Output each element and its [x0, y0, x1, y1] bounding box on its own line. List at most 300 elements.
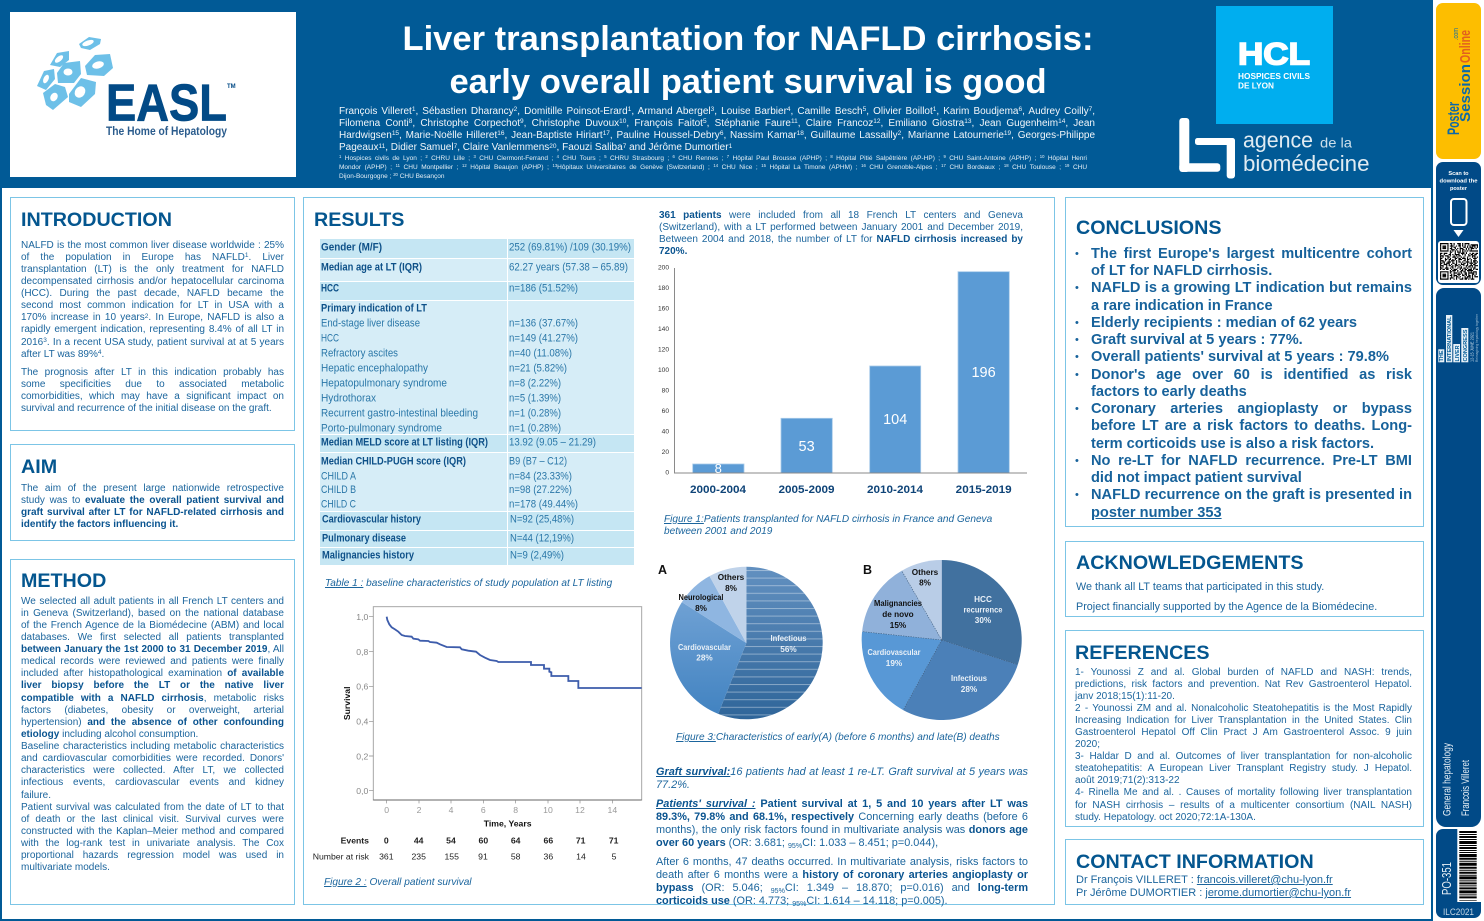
- text: method: multivariate models.: [21, 862, 110, 873]
- title: Liver transplantation for NAFLD cirrhosis:: [402, 20, 1094, 58]
- text: introduction: [21, 240, 284, 414]
- caption: figure 1: [664, 514, 992, 537]
- text: method: between January the 1st 2000 to 31 December 2019, All: [21, 644, 284, 655]
- text: method: Patient survival was calculated from the date of LT to that: [21, 802, 284, 813]
- text: aim: graft survival after LT for NAFLD-related cirrhosis and: [21, 507, 284, 518]
- congress logo: LIVER: [1455, 345, 1461, 362]
- text: references: janv 2018;15(1):11-20.: [1075, 691, 1175, 702]
- bullet list: conclusions: factors to early deaths: [1091, 384, 1247, 400]
- table: baseline characteristics: Hepatopulmonary syndrome: [321, 378, 447, 390]
- text: method: We selected all adult patients in all French LT centers and: [21, 596, 284, 606]
- chart: Kaplan-Meier overall survival: 0,4: [356, 717, 369, 727]
- sidebar: poster number and barcode: [1436, 829, 1481, 918]
- bullet list: conclusions: of LT for NAFLD cirrhosis.: [1091, 263, 1272, 279]
- chart: bar chart of transplants per period: 2000-2004: [690, 484, 747, 496]
- logo: HCL: DE LYON: [1238, 81, 1274, 91]
- table: baseline characteristics: Median age at LT (IQR): [321, 262, 422, 274]
- logo: EASL: The Home of Hepatology: [106, 125, 227, 138]
- chart: pie A and pie B: [658, 560, 1022, 720]
- text: method: in Geneva (Switzerland), based on the national database: [21, 608, 284, 619]
- panel: conclusions: •: [1075, 317, 1079, 329]
- chart: Kaplan-Meier overall survival: 361: [379, 852, 394, 862]
- text: acknowledgements: We thank all LT teams that participated in this study.: [1076, 581, 1324, 593]
- authors: François Villeret1, Sébastien Dharancy2, Domitille Poinsot-Erard1, Armand Abergel3, Louise Barbier4, Camille Besch5, Olivier Boillot1, Karim Boudjema6, Audrey Coilly7,: [339, 106, 1095, 116]
- chart: bar chart of transplants per period: 196: [971, 365, 996, 381]
- text: introduction: NALFD is the most common liver disease worldwide : 25%: [21, 240, 284, 250]
- text: method: characteristics were collected. After LT, we collected: [21, 765, 284, 776]
- table: baseline characteristics: 62.27 years (57.38 – 65.89): [509, 262, 628, 274]
- chart: Kaplan-Meier overall survival: 6: [481, 805, 486, 815]
- chart: bar chart of transplants per period: 2015-2019: [956, 484, 1012, 496]
- chart: bar chart of transplants per period: 140: [658, 326, 669, 333]
- heading: conclusions: CONCLUSIONS: [1076, 217, 1221, 239]
- bullet list: conclusions: NAFLD is a growing LT indication but remains: [1091, 280, 1412, 296]
- text: method: [21, 596, 284, 873]
- logo: HCL: HOSPICES CIVILS: [1238, 71, 1310, 81]
- chart: bar chart of transplants per period: [658, 264, 1027, 496]
- chart: Kaplan-Meier overall survival: 58: [511, 852, 521, 862]
- text: method: proportional hazards regression model was used in: [21, 850, 284, 861]
- panel: method: [10, 559, 295, 905]
- table: baseline characteristics: n=136 (37.67%): [509, 318, 578, 330]
- text: contact details: Pr Jérôme DUMORTIER : jerome.dumortier@chu-lyon.fr: [1076, 887, 1351, 899]
- pie B: B: [863, 563, 872, 577]
- table: baseline characteristics: End-stage liver disease: [321, 318, 420, 330]
- text: method: databases. We first selected all patients transplanted: [21, 632, 284, 643]
- table: baseline characteristics: n=98 (27.22%): [509, 484, 572, 496]
- chart: bar chart of transplants per period: 53: [799, 439, 815, 455]
- text: method: infectious events, cardiovascular events and kidney: [21, 777, 284, 788]
- pie B: 8%: [919, 578, 932, 588]
- panel: introduction: [10, 197, 295, 431]
- bullet list: conclusions: Donor's age over 60 is identified as risk: [1091, 367, 1412, 383]
- chart: Kaplan-Meier overall survival: 14: [576, 852, 586, 862]
- logo: EASL: TM: [227, 84, 236, 90]
- panel: contact information: [1065, 839, 1424, 905]
- text: references: Increasing Indication for Liver Transplantation in the United States. Clin: [1075, 715, 1412, 726]
- bullet list: conclusions: a rare indication in France: [1091, 298, 1273, 314]
- table: baseline characteristics: N=92 (25,48%): [510, 514, 574, 526]
- text: introduction: (HCC). During the past decade, NAFLD became the: [21, 288, 284, 299]
- chart: Kaplan-Meier overall survival: 54: [446, 836, 456, 846]
- congress logo: Reimagining hepatology together: [1475, 313, 1479, 362]
- text: introduction: survival and recurrence of the initial disease on the graft.: [21, 403, 272, 414]
- logo: agence de la biomédecine: agence: [1243, 128, 1313, 153]
- text: method: compatible with a NAFLD cirrhosis, metabolic risks: [21, 692, 284, 704]
- bullet list: conclusions: Graft survival at 5 years : 77%.: [1091, 332, 1303, 348]
- text: references: Gastroenterol Hepatol Off Clin Pract J Am Gastroenterol Assoc. 9 juin: [1075, 727, 1412, 738]
- panel: aim: [10, 444, 295, 541]
- table: baseline characteristics: CHILD C: [321, 499, 356, 511]
- pie B: [862, 560, 1022, 720]
- sidebar: scan to download with QR code: [1436, 162, 1481, 285]
- bullet list: conclusions: Elderly recipients : median of 62 years: [1091, 315, 1357, 331]
- bullet list: conclusions: term corticoids use is also a risk factors.: [1091, 436, 1374, 452]
- caption: figure 1: between 2001 and 2019: [664, 526, 772, 537]
- text: references: for NASH cirrhosis – results of a multicenter consortium (NAIL NASH): [1075, 800, 1412, 811]
- panel: conclusions: [1065, 197, 1424, 527]
- chart: bar chart of transplants per period: 8: [715, 461, 722, 476]
- chart: Kaplan-Meier overall survival: 12: [575, 805, 585, 815]
- text: introduction: second most common indication for LT in USA with a: [21, 300, 284, 311]
- pie A: Neurological: [678, 593, 724, 602]
- chart: bar chart of transplants per period: 160: [658, 306, 669, 312]
- text: survival results: [656, 766, 1028, 908]
- pie A: Infectious: [770, 634, 807, 643]
- pie B: Cardiovascular: [868, 648, 921, 657]
- panel: references: [1065, 630, 1424, 827]
- panel: conclusions: •: [1075, 455, 1079, 467]
- congress logo: THE: [1439, 350, 1445, 362]
- panel: conclusions: •: [1075, 248, 1079, 260]
- table: baseline characteristics: 252 (69.81%) /109 (30.19%): [509, 242, 631, 254]
- congress logo: General hepatology: [1442, 743, 1454, 816]
- caption: figure 2: Figure 2 : Overall patient survival: [324, 876, 472, 888]
- chart: bar chart of transplants per period: 104: [883, 412, 907, 428]
- chart: Kaplan-Meier overall survival: 5: [612, 852, 617, 862]
- chart: Kaplan-Meier overall survival: Number at risk: [313, 852, 370, 862]
- barcode bars: [1459, 831, 1477, 901]
- text: references: 1- Younossi Z and al. Global burden of NAFLD and NASH: trends,: [1075, 666, 1412, 678]
- text: contact details: [1076, 874, 1352, 899]
- chart: Kaplan-Meier overall survival: Events: [341, 836, 369, 846]
- table: baseline characteristics: n=40 (11.08%): [509, 348, 572, 360]
- text: references: 3- Haldar D and al. Outcomes of liver transplantation for non-alcoholic: [1075, 751, 1412, 762]
- chart: Kaplan-Meier overall survival: 2: [417, 805, 422, 815]
- chart: bar chart of transplants per period: 0: [665, 470, 669, 476]
- text: introduction: decompensated cirrhosis and/or hepatocellular carcinoma: [21, 276, 284, 287]
- table: baseline characteristics: HCC: [321, 283, 339, 295]
- panel: conclusions: •: [1075, 369, 1079, 381]
- logo: EASL: EASL: [106, 75, 227, 133]
- chart: Kaplan-Meier overall survival: 10: [543, 805, 553, 815]
- chart: bar chart of transplants per period: 100: [658, 367, 669, 374]
- text: results intro: (Switzerland), with a LT performed between January 2001 and December 2019,: [659, 222, 1023, 233]
- table: baseline characteristics: Cardiovascular history: [322, 514, 421, 526]
- text: method: liver biopsy before the LT or the native liver: [21, 680, 284, 691]
- chart: Kaplan-Meier overall survival: 36: [544, 852, 553, 862]
- chart: bar chart of transplants per period: 200: [658, 264, 669, 272]
- QR pattern: [1440, 244, 1478, 279]
- text: references: 2 - Younossi ZM and al. Nonalcoholic Steatohepatitis is the Most Rapidly: [1075, 703, 1412, 714]
- pie A: A: [658, 563, 667, 577]
- sidebar: congress banner: [1436, 288, 1481, 827]
- sidebar: PosterSessionOnline badge: Online: [1457, 30, 1474, 63]
- header band: [0, 0, 1433, 188]
- caption: figure 1: Figure 1:Patients transplanted for NAFLD cirrhosis in France and Geneva: [664, 514, 992, 524]
- chart: Kaplan-Meier overall survival: 4: [449, 805, 454, 815]
- sidebar: PosterSessionOnline badge: .com: [1453, 28, 1460, 40]
- chart: bar chart of transplants per period: 80: [662, 388, 669, 394]
- text: method: hypertension) and the absence of other confounding: [21, 717, 284, 728]
- sidebar: scan to download with QR code: poster: [1450, 186, 1468, 192]
- panel: conclusions: •: [1075, 334, 1079, 346]
- table: baseline characteristics: HCC: [321, 333, 339, 345]
- text: introduction: 170% increase in 10 years2. In Europe, NAFLD is also a: [21, 312, 284, 323]
- text: survival results: corticoids use (OR: 4.773; 95%CI: 1.614 – 14.118; p=0.005).: [656, 894, 948, 908]
- table: baseline characteristics: n=8 (2.22%): [509, 378, 561, 390]
- table: baseline characteristics: N=44 (12,19%): [510, 533, 574, 545]
- text: introduction: some specificities due to associated metabolic: [21, 379, 284, 390]
- logo: agence de la biomédecine: [1179, 118, 1370, 178]
- chart: Kaplan-Meier overall survival: 0,2: [356, 751, 369, 761]
- chart: Kaplan-Meier overall survival: [313, 606, 642, 862]
- bullet list: conclusions: did not impact patient survival: [1091, 470, 1302, 486]
- text: references: predictions, risk factors and prevention. Nat Rev Gastroenterol Hepatol.: [1075, 679, 1412, 690]
- text: introduction: The prognosis after LT in this indication probably has: [21, 367, 284, 378]
- text: introduction: comorbidities, which may have a significant impact on: [21, 391, 284, 402]
- pie A: 28%: [696, 654, 713, 662]
- text: survival results: over 60 years (OR: 3.681; 95%CI: 1.033 – 8.451; p=0.044),: [656, 836, 938, 850]
- chart: Kaplan-Meier overall survival: 91: [478, 852, 488, 862]
- pie B: 28%: [961, 685, 978, 694]
- affiliations: 1 Hospices civils de Lyon ; 2 CHRU Lille ; 3 CHU Clermont-Ferrand ; 4 CHU Tours ; 5 CHRU Strasbourg ; 6 CHU Rennes ; 7 Hôpital Paul Brousse (APHP) ; 8 Hôpital Pitié Salpêtrière (AP-HP) ; 9 CHU Saint-Antoine (APHP) ; 10 Hôpital Henri: [339, 154, 1087, 162]
- affiliations: Mondor (APHP) ; 11 CHU Montpellier ; 12 Hôpital Beaujon (APHP) ; 13Hôpitaux Universitaires de Genève (Switzerland) ; 14 CHU Nice ; 15 Hôpital La Timone (APHM) ; 16 CHU Grenoble-Alpes ; 17 CHU Bordeaux ; 18 CHU Toulouse ; 19 CHU: [339, 163, 1087, 171]
- text: introduction: after LT was 89%4.: [21, 349, 104, 360]
- table: baseline characteristics: Recurrent gastro-intestinal bleeding: [321, 408, 478, 420]
- chart: bar chart of transplants per period: 2010-2014: [867, 484, 924, 496]
- bullet list: conclusions: No re-LT for NAFLD recurrence. Pre-LT BMI: [1091, 453, 1412, 469]
- text: survival results: 77.2%.: [656, 778, 690, 790]
- sidebar: PosterSessionOnline badge: Session: [1457, 64, 1474, 122]
- chart: Kaplan-Meier overall survival: 60: [479, 836, 488, 846]
- congress logo: CONGRESS: [1463, 329, 1469, 362]
- congress logo: Francois Villeret: [1460, 759, 1472, 816]
- congress logo: [1438, 313, 1479, 816]
- sidebar: poster number and barcode: ILC2021: [1443, 907, 1474, 917]
- text: references: 2020;: [1075, 739, 1100, 750]
- sidebar: poster number and barcode: PO-351: [1439, 862, 1454, 895]
- text: acknowledgements: Project financially supported by the Agence de la Biomédecine.: [1076, 600, 1377, 612]
- pie A: 8%: [695, 604, 708, 613]
- table: baseline characteristics: CHILD A: [321, 471, 357, 483]
- sidebar: PosterSessionOnline badge: Poster: [1444, 102, 1463, 135]
- chart: Kaplan-Meier overall survival: 0: [384, 805, 389, 815]
- heading: method: METHOD: [21, 570, 106, 592]
- chart: Kaplan-Meier overall survival: 44: [414, 836, 424, 846]
- text: method: Baseline characteristics including metabolic characteristics: [21, 741, 284, 752]
- table: baseline characteristics: 13.92 (9.05 – 21.29): [509, 437, 596, 449]
- pie B: de novo: [882, 610, 914, 619]
- table: baseline characteristics: [320, 239, 634, 565]
- table: baseline characteristics: CHILD B: [321, 484, 356, 496]
- heading: aim: AIM: [21, 456, 57, 478]
- text: aim: identify the factors influencing it.: [21, 519, 178, 530]
- table: baseline characteristics: n=21 (5.82%): [509, 363, 567, 375]
- text: aim: study was to evaluate the overall patient survival and: [21, 495, 284, 506]
- chart: Kaplan-Meier overall survival: 155: [444, 852, 459, 862]
- text: acknowledgements: [1076, 581, 1377, 612]
- pie B: 19%: [886, 659, 903, 668]
- text: method: etiology including alcohol consumption.: [21, 729, 198, 740]
- text: introduction: rapidly emergent indication, representing 8.4% of all LT in: [21, 324, 284, 335]
- panel: conclusions: •: [1075, 489, 1079, 501]
- sidebar: scan to download with QR code: download the: [1440, 178, 1478, 184]
- text: references: study. Hepatology. oct 2020;72:1A-130A.: [1075, 812, 1256, 823]
- text: references: [1074, 666, 1412, 823]
- text: contact details: Dr François VILLERET : francois.villeret@chu-lyon.fr: [1076, 874, 1333, 886]
- table: baseline characteristics: n=186 (51.52%): [509, 283, 578, 295]
- bullet list: conclusions: The first Europe's largest multicentre cohort: [1091, 246, 1412, 262]
- authors: [339, 106, 1095, 153]
- authors: Pageaux11, Didier Samuel7, Claire Vanlemmens20, Faouzi Saliba7 and Jérôme Dumortier1: [339, 142, 732, 153]
- panel: conclusions: •: [1075, 282, 1079, 294]
- pie A: Cardiovascular: [678, 643, 732, 652]
- text: method: included after histopathological examination of available: [21, 668, 284, 679]
- chart: bar chart of transplants per period: 20: [662, 449, 669, 456]
- text: method: factors (diabetes, obesity or overweight, arterial: [21, 705, 284, 716]
- chart: Kaplan-Meier overall survival: 8: [513, 805, 518, 815]
- table: baseline characteristics: Refractory ascites: [321, 348, 399, 360]
- text: references: 4- Rinella Me and al. . Causes of mortality following liver transplantation: [1075, 787, 1412, 798]
- text: introduction: of the population in Europe has NAFLD1. Liver: [21, 252, 284, 263]
- title: early overall patient survival is good: [449, 63, 1047, 101]
- text: method: of death or the last clinical visit. Survival curves were: [21, 814, 284, 825]
- table: baseline characteristics: Malignancies history: [322, 550, 414, 562]
- text: survival results: months), the only risk factors found in multivariate analysis was donors age: [656, 824, 1028, 836]
- frame: left strip: [0, 188, 2, 921]
- chart: Kaplan-Meier overall survival: Time, Years: [484, 818, 532, 828]
- text: references: steatohepatitis: A European Liver Transplant Registry study. J Hepatol.: [1075, 763, 1412, 774]
- text: results intro: 361 patients were included from all 18 French LT centers and Geneva: [659, 210, 1023, 221]
- bullet list: conclusions: NAFLD recurrence on the graft is presented in: [1091, 487, 1412, 503]
- text: results intro: [659, 210, 1023, 257]
- heading: contact information: CONTACT INFORMATION: [1076, 851, 1314, 873]
- panel: results: [303, 197, 1055, 905]
- pie A: Others: [718, 573, 745, 582]
- text: references: août 2019;71(2):313-22: [1075, 775, 1180, 786]
- heading: acknowledgements: ACKNOWLEDGEMENTS: [1076, 552, 1304, 574]
- text: aim: [21, 482, 284, 530]
- chart: Kaplan-Meier overall survival: 1,0: [356, 612, 369, 622]
- logo: HCL: HCL: [1238, 35, 1310, 71]
- sidebar: PosterSessionOnline badge: [1436, 3, 1481, 159]
- text: method: of the French Agence de la Biomédecine (ABM) and local: [21, 620, 284, 631]
- frame: bottom strip: [0, 919, 1433, 921]
- text: survival results: 89.3%, 79.8% and 68.1%, respectively Concerning early deaths (before 6: [656, 810, 1028, 822]
- table: baseline characteristics: n=84 (23.33%): [509, 471, 572, 483]
- pie A: [658, 563, 823, 719]
- pie B: 30%: [975, 616, 992, 625]
- chart: Kaplan-Meier overall survival: 235: [411, 852, 426, 862]
- text: survival results: Graft survival:16 patients had at least 1 re-LT. Graft survival at 5 years was: [656, 766, 1028, 778]
- sidebar: scan to download with QR code: Scan to: [1448, 171, 1469, 177]
- frame: right strip: [1431, 188, 1433, 921]
- table: baseline characteristics: n=178 (49.44%): [509, 499, 578, 511]
- table: baseline characteristics: n=1 (0.28%): [509, 408, 561, 420]
- text: method: with the log-rank test in univariate analysis. The Cox: [21, 838, 284, 849]
- text: survival results: Patients' survival : Patient survival at 1, 5 and 10 years after LT was: [656, 798, 1028, 810]
- text: survival results: death after 6 months were a history of coronary arteries angioplasty or: [656, 868, 1028, 880]
- pie B: Malignancies: [874, 599, 922, 608]
- chart: Kaplan-Meier overall survival: 14: [608, 805, 617, 815]
- text: method: failure.: [21, 790, 51, 800]
- table: baseline characteristics: n=149 (41.27%): [509, 333, 578, 345]
- logo: EASL: [10, 12, 296, 177]
- chart: Kaplan-Meier overall survival: 71: [609, 836, 619, 846]
- table: baseline characteristics: Hepatic encephalopathy: [321, 363, 429, 375]
- bullet list: conclusions: before LT are a risk factors to deaths. Long-: [1091, 418, 1412, 434]
- logo: HCL: [1216, 6, 1333, 124]
- text: method: medical records were reviewed and patients were finally: [21, 656, 284, 667]
- affiliations: Dijon-Bourgogne ; 20 CHU Besançon: [339, 172, 445, 180]
- heading: introduction: INTRODUCTION: [21, 209, 172, 231]
- table: baseline characteristics: Hydrothorax: [321, 393, 377, 405]
- congress logo: INTERNATIONAL: [1447, 316, 1453, 362]
- text: method: constructed with the Kaplan–Meier method and compared: [21, 826, 284, 837]
- caption: figure 3: Figure 3:Characteristics of early(A) (before 6 months) and late(B) deaths: [676, 732, 1000, 743]
- bullet list: conclusions: poster number 353: [1091, 505, 1222, 521]
- chart: Kaplan-Meier overall survival: 0,6: [356, 682, 369, 692]
- table: baseline characteristics: Gender (M/F): [321, 242, 382, 254]
- pie A: 8%: [725, 584, 738, 593]
- pie B: 15%: [890, 621, 907, 630]
- text: method: and cardiovascular comorbidities were recorded. Donors': [21, 753, 284, 764]
- chart: bar chart of transplants per period: 40: [662, 428, 669, 436]
- chart: bar chart of transplants per period: 60: [662, 408, 669, 415]
- heading: results: RESULTS: [314, 209, 404, 231]
- chart: Kaplan-Meier overall survival: 0,0: [356, 786, 369, 796]
- heading: references: REFERENCES: [1075, 642, 1210, 664]
- table: baseline characteristics: Median CHILD-PUGH score (IQR): [321, 456, 466, 468]
- chart: Kaplan-Meier overall survival: Survival: [342, 686, 352, 720]
- chart: Kaplan-Meier overall survival: 71: [576, 836, 586, 846]
- text: introduction: transplantation (LT) is the only treatment for NAFLD: [21, 264, 284, 275]
- chart: bar chart of transplants per period: 180: [658, 285, 669, 292]
- bullet list: conclusions: Coronary arteries angioplasty or bypass: [1091, 401, 1412, 417]
- table: baseline characteristics: Median MELD score at LT listing (IQR): [321, 437, 488, 449]
- table: baseline characteristics: Primary indication of LT: [321, 303, 427, 315]
- caption: table 1: Table 1 : baseline characteristics of study population at LT listing: [325, 578, 612, 588]
- pie B: recurrence: [964, 606, 1003, 614]
- table: baseline characteristics: N=9 (2,49%): [510, 550, 564, 562]
- chart: bar chart of transplants per period: 120: [658, 346, 669, 354]
- chart: Kaplan-Meier overall survival: 0: [384, 836, 389, 846]
- table: baseline characteristics: B9 (B7 – C12): [509, 456, 567, 468]
- table: baseline characteristics: n=1 (0.28%): [509, 423, 561, 435]
- panel: acknowledgements: [1065, 541, 1424, 617]
- text: survival results: bypass (OR: 5.046; 95%CI: 1.349 – 18.870; p=0.016) and long-term: [656, 882, 1028, 895]
- pie A: 56%: [780, 645, 797, 654]
- congress logo: 12-15 JUNE 2021: [1470, 332, 1474, 362]
- panel: conclusions: •: [1075, 403, 1079, 415]
- logo: agence de la biomédecine: de la: [1320, 135, 1352, 151]
- authors: Hardwigsen15, Marie-Noëlle Hilleret16, Jean-Baptiste Hiriart17, Pauline Houssel-Debry6, Nassim Kamar18, Guillaume Lassailly2, Marianne Latournerie19, Georges-Philippe: [339, 130, 1095, 141]
- panel: conclusions: •: [1075, 351, 1079, 363]
- authors: Filomena Conti8, Christophe Corpechot9, Christophe Duvoux10, François Faitot5, Stéphanie Faure11, Claire Francoz12, Emiliano Giostra13, Jean Gugenheim14, Jean: [339, 118, 1095, 129]
- pie B: Others: [912, 568, 939, 577]
- table: baseline characteristics: Porto-pulmonary syndrome: [321, 423, 442, 435]
- text: aim: The aim of the present large nationwide retrospective: [21, 482, 284, 494]
- logo: agence de la biomédecine: biomédecine: [1243, 151, 1370, 176]
- pie B: HCC: [974, 595, 992, 604]
- title: [402, 20, 1094, 101]
- table: baseline characteristics: n=5 (1.39%): [509, 393, 561, 405]
- pie B: Infectious: [951, 674, 987, 683]
- text: survival results: After 6 months, 47 deaths occurred. In multivariate analysis, risks factors to: [656, 856, 1028, 868]
- chart: Kaplan-Meier overall survival: 66: [544, 836, 553, 846]
- bullet list: conclusions: [1075, 246, 1412, 521]
- table: baseline characteristics: Pulmonary disease: [322, 533, 406, 545]
- chart: Kaplan-Meier overall survival: 64: [511, 836, 521, 846]
- chart: Kaplan-Meier overall survival: 0,8: [356, 647, 369, 657]
- text: introduction: 20163. In a recent USA study, patient survival at at 5 years: [21, 336, 284, 348]
- affiliations: [339, 154, 1087, 180]
- chart: bar chart of transplants per period: 2005-2009: [778, 484, 834, 496]
- text: results intro: 720%.: [659, 246, 687, 257]
- bullet list: conclusions: Overall patients' survival at 5 years : 79.8%: [1091, 349, 1389, 365]
- text: results intro: Between 2004 and 2018, the number of LT for NAFLD cirrhosis increased by: [659, 234, 1023, 245]
